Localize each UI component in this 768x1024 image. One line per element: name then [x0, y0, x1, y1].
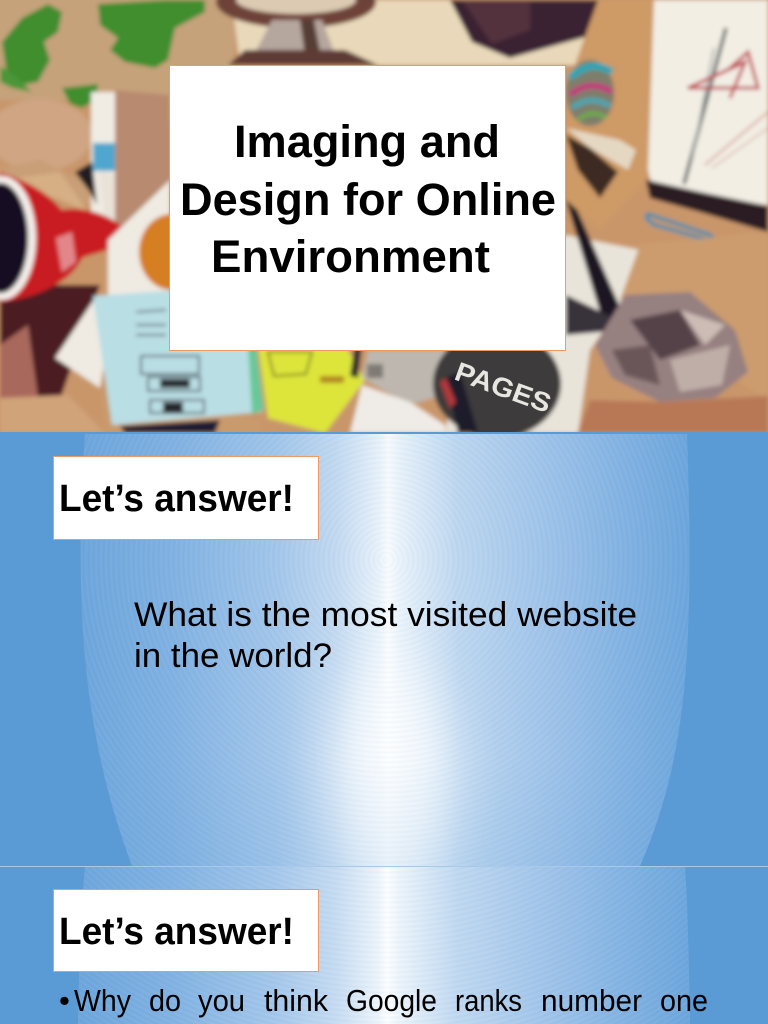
pen and red sketch: [684, 28, 768, 184]
wireframe sketches on blue note: [136, 310, 204, 413]
wooden desk gradient left: [114, 90, 169, 225]
pages dark circle: [430, 351, 564, 432]
dark shadow under mug: [0, 285, 100, 400]
wood right strip: [566, 0, 653, 212]
hourglass object: [216, 0, 378, 65]
map paper with green continents: [0, 0, 240, 205]
title card: [170, 66, 566, 350]
blue paper clips: [647, 214, 712, 240]
crumpled paper ball: [595, 292, 748, 402]
PAGES label on circle: PAGES: [451, 356, 555, 419]
panel: slide one background: [80, 434, 690, 866]
heading card: let's answer one: Let’s answer!: [59, 478, 294, 520]
title text: Environment: [211, 231, 490, 282]
bullet text: think: [264, 983, 328, 1018]
white laptop left edge: [55, 180, 170, 388]
yellow sticky note: [258, 345, 365, 433]
white paper sheet right: [445, 235, 640, 433]
bullet text: ranks: [455, 983, 522, 1018]
panel: slide two background: [0, 866, 768, 1024]
heading card: let's answer one: [54, 456, 318, 540]
wood lower right panel: [618, 234, 716, 302]
title text: Design for Online: [180, 174, 556, 225]
bullet text: •: [59, 983, 70, 1018]
top centre cream surface: [232, 0, 587, 68]
black pen on right of the card: [566, 200, 622, 320]
bullet text: you: [198, 983, 245, 1018]
bullet text: Google: [346, 983, 437, 1018]
bullet text: number: [541, 983, 642, 1018]
photo: desk flat lay background: [0, 0, 768, 440]
bullet text: do: [149, 983, 181, 1018]
title text: [180, 116, 556, 282]
wood bottom-left: [100, 390, 260, 433]
sketch blocks: [160, 379, 190, 412]
heading card: let's answer two: [54, 890, 318, 972]
red mug: [0, 172, 126, 302]
dark wallet: [450, 0, 598, 58]
pen: [445, 372, 478, 433]
orange circle badge: [136, 212, 169, 292]
question text: What is the most visited website: [134, 596, 637, 634]
white notebook: [646, 0, 768, 232]
bullet text: Why: [74, 983, 131, 1018]
dark pen and laptop: [350, 345, 362, 378]
colourful rubber band ball: [566, 60, 636, 198]
bullet text: one: [660, 983, 708, 1018]
bullet text: [59, 983, 708, 1018]
blue sticky note: [93, 290, 262, 425]
question text: [134, 596, 637, 675]
blue and white tag: [75, 92, 115, 225]
title text: Imaging and: [234, 116, 500, 167]
question text: in the world?: [134, 637, 332, 675]
heading card: let's answer two: Let’s answer!: [59, 911, 294, 953]
cream paper under mug: [20, 172, 86, 212]
